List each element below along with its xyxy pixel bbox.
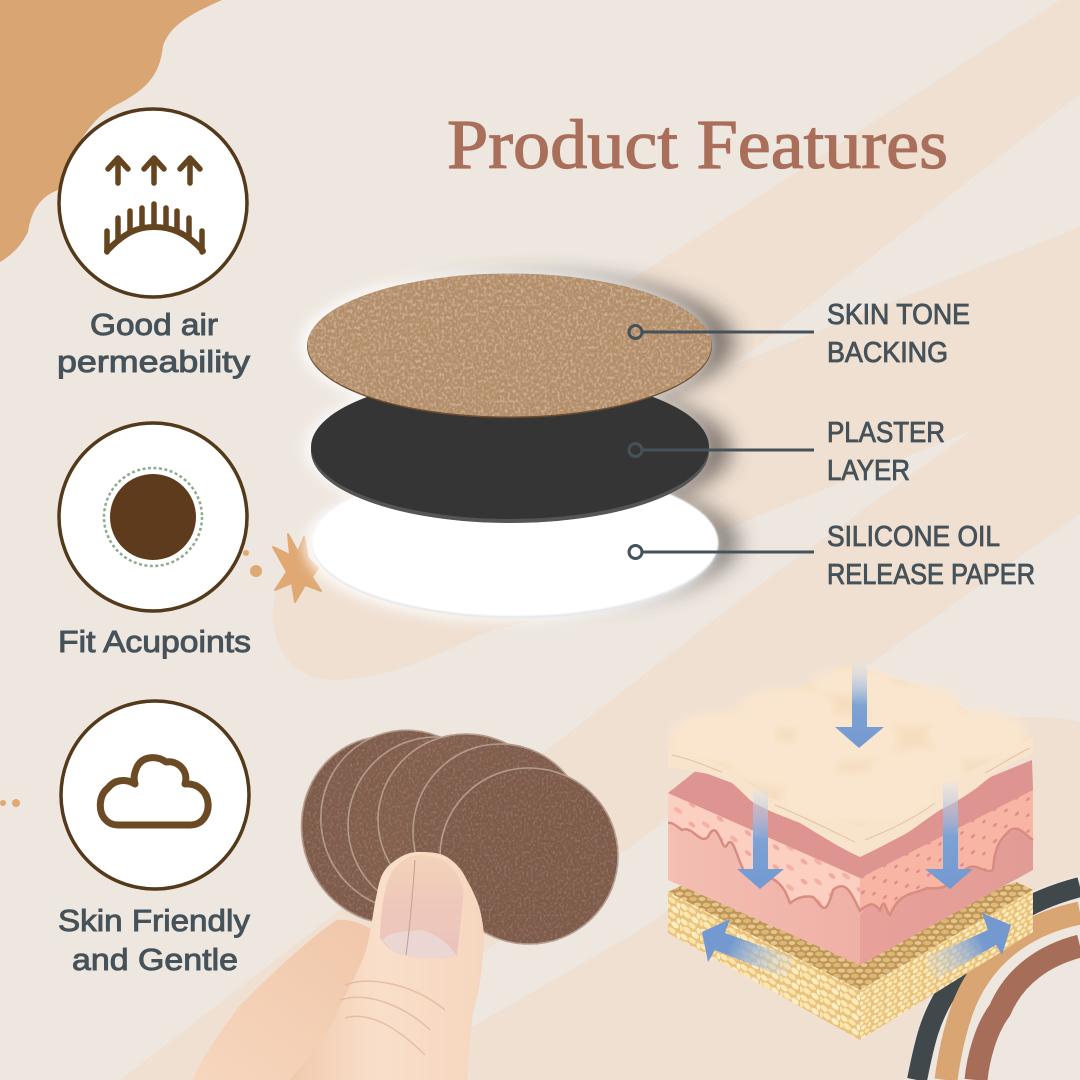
fat layer bbox=[668, 882, 1033, 1040]
layer: skin tone backing bbox=[307, 274, 712, 418]
quilted cushions bbox=[669, 668, 1027, 823]
epidermis layer bbox=[668, 665, 1033, 857]
feature: skin friendly and gentle bbox=[58, 701, 251, 977]
callout: plaster layer: PLASTER bbox=[827, 417, 945, 449]
callout: silicone oil release paper: RELEASE PAPER bbox=[827, 559, 1035, 591]
decorative splash bbox=[0, 534, 321, 807]
callout: silicone oil release paper bbox=[629, 521, 1035, 591]
arrow: down left bbox=[737, 790, 784, 889]
title: Product Features bbox=[447, 107, 948, 184]
layer: silicone oil release paper bbox=[312, 468, 718, 618]
icon: air permeability bbox=[59, 109, 247, 297]
callout: plaster layer bbox=[629, 417, 945, 487]
thumbnail bbox=[380, 855, 463, 958]
feature: fit acupoints bbox=[58, 423, 251, 659]
callout: skin tone backing: SKIN TONE bbox=[827, 299, 970, 331]
decorative corner blob bbox=[0, 0, 222, 262]
arrow: top down bbox=[835, 663, 884, 748]
thumb bbox=[290, 852, 484, 1080]
label: good air permeability: permeability bbox=[57, 344, 251, 379]
arrow: spreading left bbox=[702, 919, 795, 978]
label: good air permeability: Good air bbox=[90, 307, 218, 342]
skin layers diagram bbox=[668, 663, 1033, 1040]
label: skin friendly and gentle: and Gentle bbox=[72, 942, 238, 977]
index finger bbox=[193, 920, 400, 1080]
felt plaster stack bbox=[281, 711, 618, 944]
hand holding plasters bbox=[193, 711, 618, 1080]
callout: skin tone backing bbox=[629, 299, 970, 369]
layer: plaster bbox=[311, 375, 709, 523]
arrow: down right bbox=[925, 783, 973, 889]
icon: cloud bbox=[61, 701, 249, 889]
exploded plaster layers bbox=[300, 270, 1035, 622]
dermis layer bbox=[668, 760, 1033, 965]
decorative rainbow arcs bbox=[906, 875, 1080, 1080]
feature: good air permeability bbox=[57, 109, 251, 379]
callout: plaster layer: LAYER bbox=[827, 455, 910, 487]
label: skin friendly and gentle bbox=[58, 903, 251, 977]
callout: skin tone backing: BACKING bbox=[827, 337, 948, 369]
label: fit acupoints: Fit Acupoints bbox=[58, 624, 251, 659]
arrow: spreading right bbox=[925, 913, 1011, 980]
icon: acupoint bbox=[59, 423, 247, 611]
layer shadows bbox=[300, 270, 740, 622]
label: good air permeability bbox=[57, 307, 251, 379]
label: skin friendly and gentle: Skin Friendly bbox=[58, 903, 251, 938]
thumb knuckle creases bbox=[340, 981, 445, 1055]
callout: silicone oil release paper: SILICONE OIL bbox=[827, 521, 1000, 553]
